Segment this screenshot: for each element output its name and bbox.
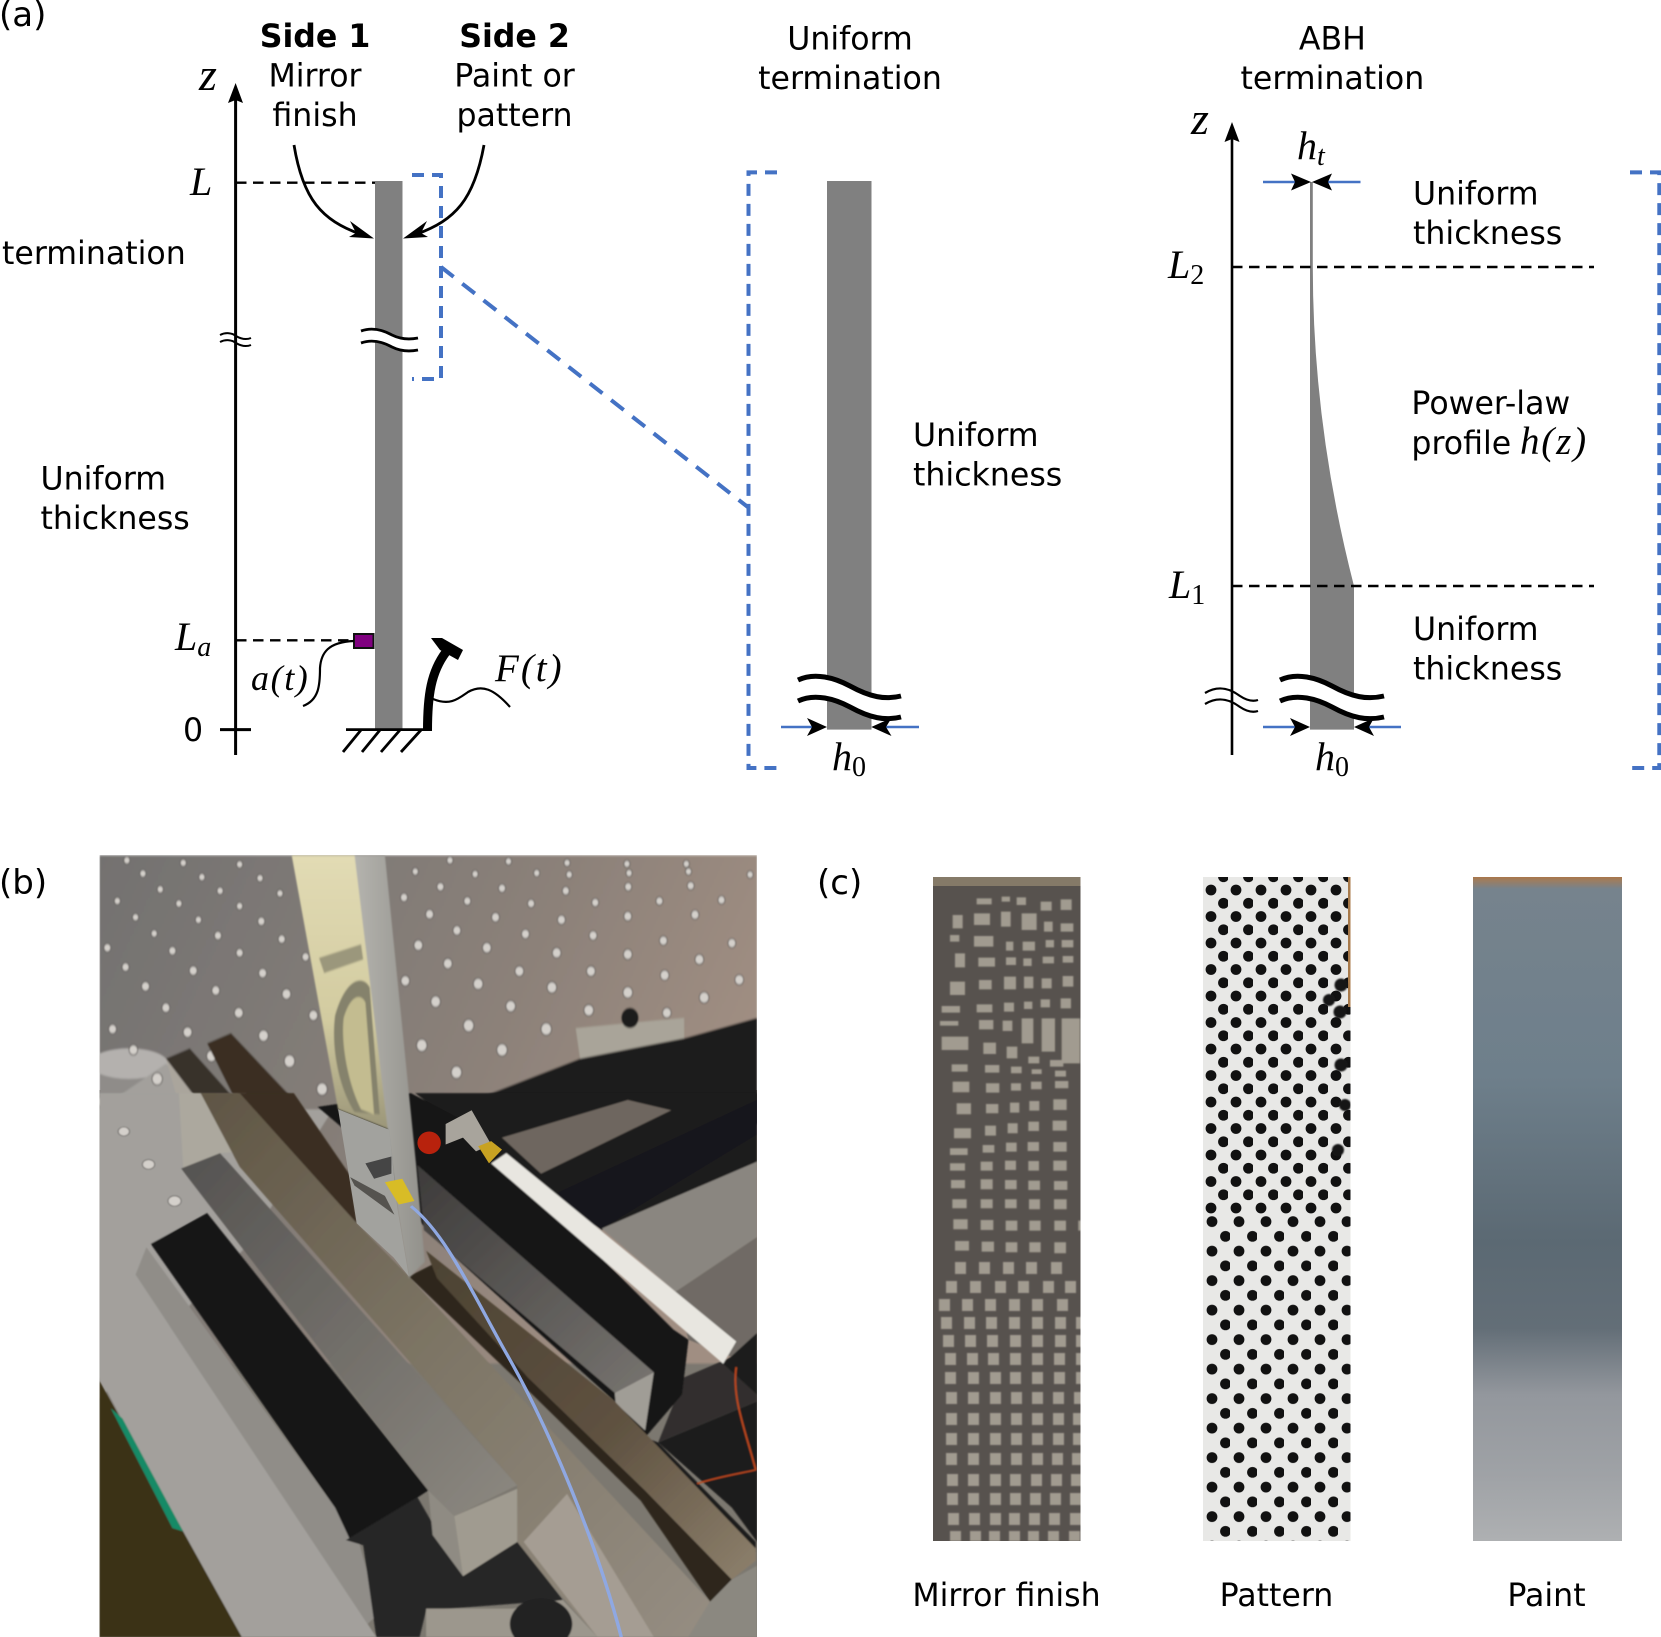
h0 dimension arrows bbox=[1263, 718, 1401, 736]
pattern strip bbox=[1203, 877, 1351, 1542]
optical table and upper machinery bbox=[90, 855, 757, 1399]
panel: (a) beam schematics bbox=[0, 0, 1659, 783]
uniform thickness lower label: thickness bbox=[1413, 652, 1562, 688]
uniform thickness lower label: Uniform bbox=[1413, 612, 1539, 648]
panel: (b) photo of clamped beam bbox=[0, 855, 757, 1637]
heading: side 1: Side 1 bbox=[260, 19, 370, 55]
heading: side 1: Mirror bbox=[268, 58, 362, 94]
photo illustration bbox=[90, 855, 757, 1637]
L2 dashed level bbox=[1232, 266, 1594, 268]
dark backing for the photo bbox=[100, 1090, 757, 1637]
uniform thickness label: thickness bbox=[40, 501, 190, 537]
right table plates bbox=[415, 1093, 757, 1230]
rusty back bar bbox=[237, 1093, 357, 1223]
h0 label: h bbox=[1315, 734, 1335, 779]
orange wires bbox=[697, 1367, 756, 1484]
L1 label: 1 bbox=[1191, 580, 1205, 611]
La dashed level bbox=[236, 639, 354, 641]
ht label: h bbox=[1297, 123, 1317, 168]
mirror finish label: Mirror finish bbox=[912, 1578, 1101, 1614]
uniform thickness upper label: Uniform bbox=[1413, 176, 1539, 212]
pattern label: Pattern bbox=[1220, 1578, 1333, 1614]
heading: side 2: Side 2 bbox=[459, 19, 570, 55]
termination label: termination bbox=[2, 236, 186, 272]
vise lower assembly bbox=[100, 1093, 757, 1637]
panel: (c) surface finishes bbox=[817, 863, 1622, 1614]
table holes bbox=[98, 857, 753, 1107]
front black jaw bbox=[136, 1247, 378, 1624]
paint strip bbox=[1473, 877, 1622, 1541]
bolt plate bbox=[426, 1600, 597, 1637]
z axis label: z bbox=[198, 49, 217, 100]
z axis label: z bbox=[1190, 93, 1209, 144]
ABH termination diagram bbox=[1167, 22, 1659, 783]
L label: L bbox=[189, 159, 212, 204]
axis break bbox=[1205, 688, 1258, 712]
heading: side 2: pattern bbox=[456, 98, 573, 134]
heading: ABH termination: ABH bbox=[1299, 22, 1366, 58]
blue dashed connector bbox=[441, 267, 748, 508]
back black jaw bbox=[318, 1093, 689, 1437]
ht dimension arrows bbox=[1263, 174, 1360, 190]
a(t) signal line bbox=[303, 641, 354, 706]
L2 label: L bbox=[1168, 242, 1190, 287]
L1 label: L bbox=[1169, 562, 1191, 607]
mirror finish strip bbox=[933, 877, 1084, 1541]
panel label (c): (c) bbox=[817, 863, 862, 903]
front steel bar bbox=[181, 1153, 517, 1516]
La label: L bbox=[175, 614, 197, 659]
z axis bbox=[1224, 122, 1240, 755]
blue bracket right bbox=[1630, 172, 1659, 768]
accelerometer bbox=[354, 634, 374, 648]
heading: uniform termination: Uniform bbox=[787, 22, 913, 58]
beam break bbox=[361, 329, 418, 351]
beam bbox=[375, 181, 402, 730]
beam bbox=[827, 181, 872, 730]
h0 label: h bbox=[832, 734, 852, 779]
beam break bbox=[1280, 676, 1384, 719]
ht label: t bbox=[1317, 141, 1326, 172]
z axis bbox=[228, 83, 243, 755]
clamp hatch bbox=[343, 730, 427, 752]
beam foot, sensor and connectors bbox=[338, 1109, 621, 1637]
force arrow bbox=[428, 638, 463, 731]
beam break bbox=[798, 676, 901, 719]
uniform thickness label: thickness bbox=[913, 458, 1062, 494]
zero label: 0 bbox=[183, 713, 203, 749]
h0 label: 0 bbox=[1335, 752, 1349, 783]
h0 label: 0 bbox=[852, 752, 866, 783]
white cable bbox=[491, 1153, 736, 1364]
ABH tapered beam bbox=[1310, 182, 1354, 730]
uniform thickness upper label: thickness bbox=[1413, 216, 1562, 252]
h0 dimension arrows bbox=[781, 718, 919, 736]
long bar top face bbox=[409, 1264, 732, 1602]
power-law label: profile bbox=[1411, 426, 1511, 462]
power-law label: Power-law bbox=[1411, 386, 1570, 422]
heading: side 2: Paint or bbox=[454, 58, 575, 94]
La label: a bbox=[197, 632, 211, 663]
back black machinery bbox=[490, 1017, 757, 1125]
heading: uniform termination: termination bbox=[758, 61, 942, 97]
uniform thickness label: Uniform bbox=[913, 418, 1039, 454]
blue bracket left bbox=[748, 172, 777, 768]
fuzzy speckled dots bbox=[1323, 978, 1351, 1156]
panel label (b): (b) bbox=[0, 863, 47, 903]
L dashed level bbox=[236, 181, 375, 184]
arrow: side 1 to beam bbox=[294, 145, 374, 238]
axis break bbox=[220, 333, 251, 346]
beam upper part bbox=[292, 855, 425, 1278]
rusty bars far ends bbox=[207, 1032, 288, 1094]
L2 label: 2 bbox=[1190, 260, 1204, 291]
zero tick bbox=[220, 728, 251, 731]
uniform termination diagram bbox=[748, 22, 1062, 783]
lower table holes bbox=[118, 1127, 181, 1206]
heading: side 1: finish bbox=[272, 98, 358, 134]
power-law label: h(z) bbox=[1520, 420, 1588, 463]
arrow: side 2 to beam bbox=[403, 145, 484, 238]
uniform thickness label: Uniform bbox=[40, 462, 166, 498]
L1 dashed level bbox=[1232, 585, 1594, 587]
back gray bar bbox=[417, 1165, 654, 1393]
a(t) label: a(t) bbox=[251, 658, 309, 698]
F(t) signal line bbox=[433, 688, 510, 707]
paint label: Paint bbox=[1507, 1578, 1586, 1614]
long bar wide face bbox=[201, 1093, 710, 1637]
blue zoom bracket small bbox=[412, 175, 441, 379]
overall beam diagram bbox=[2, 19, 748, 755]
F(t) label: F(t) bbox=[494, 647, 564, 690]
heading: ABH termination: termination bbox=[1241, 61, 1424, 97]
